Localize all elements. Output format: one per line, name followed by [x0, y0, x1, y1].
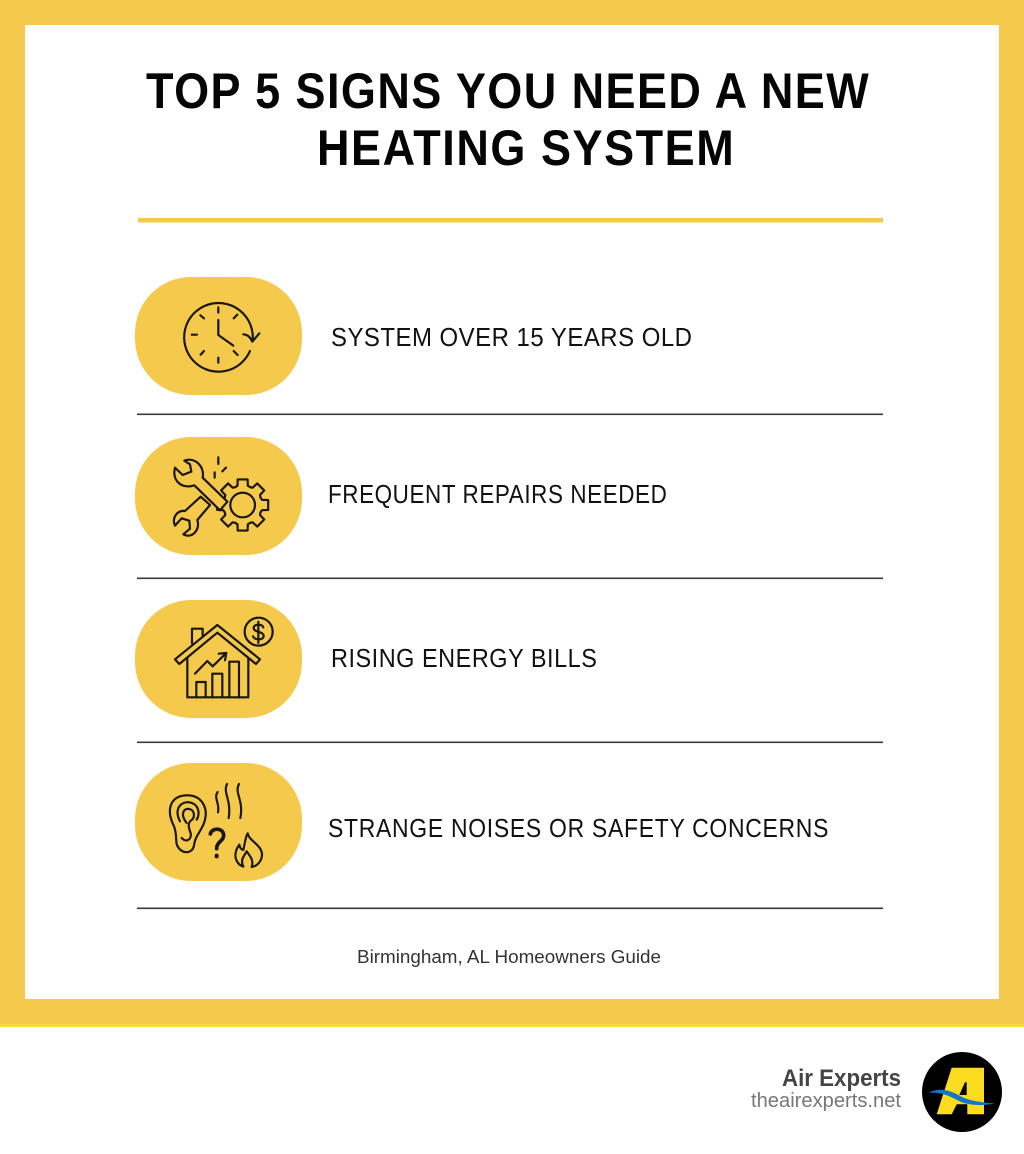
title: TOP 5 SIGNS YOU NEED A NEW	[146, 64, 869, 120]
footer note: Birmingham, AL Homeowners Guide	[357, 947, 661, 967]
title underline	[138, 218, 883, 222]
label: system age: SYSTEM OVER 15 YEARS OLD	[331, 324, 692, 352]
brand name: Air Experts	[782, 1065, 901, 1092]
logo	[922, 1052, 1002, 1132]
icon pill: clock	[135, 277, 302, 395]
row 3: energy bills	[135, 600, 597, 718]
title: HEATING SYSTEM	[317, 121, 734, 177]
brand url: theairexperts.net	[751, 1090, 901, 1112]
row 2: repairs	[135, 437, 667, 555]
icon pill: house with rising chart	[135, 600, 302, 718]
brand block	[751, 1052, 1002, 1132]
row 1: system age	[135, 277, 692, 395]
label: noises and safety: STRANGE NOISES OR SAFETY CONCERNS	[328, 815, 828, 843]
label: energy bills: RISING ENERGY BILLS	[331, 645, 597, 673]
icon pill: wrench and gear	[135, 437, 302, 555]
icon pill: ear, heat waves, question mark, flame	[135, 763, 302, 881]
title	[146, 64, 869, 177]
label: repairs: FREQUENT REPAIRS NEEDED	[328, 481, 667, 509]
row 4: noises and safety	[135, 763, 828, 881]
